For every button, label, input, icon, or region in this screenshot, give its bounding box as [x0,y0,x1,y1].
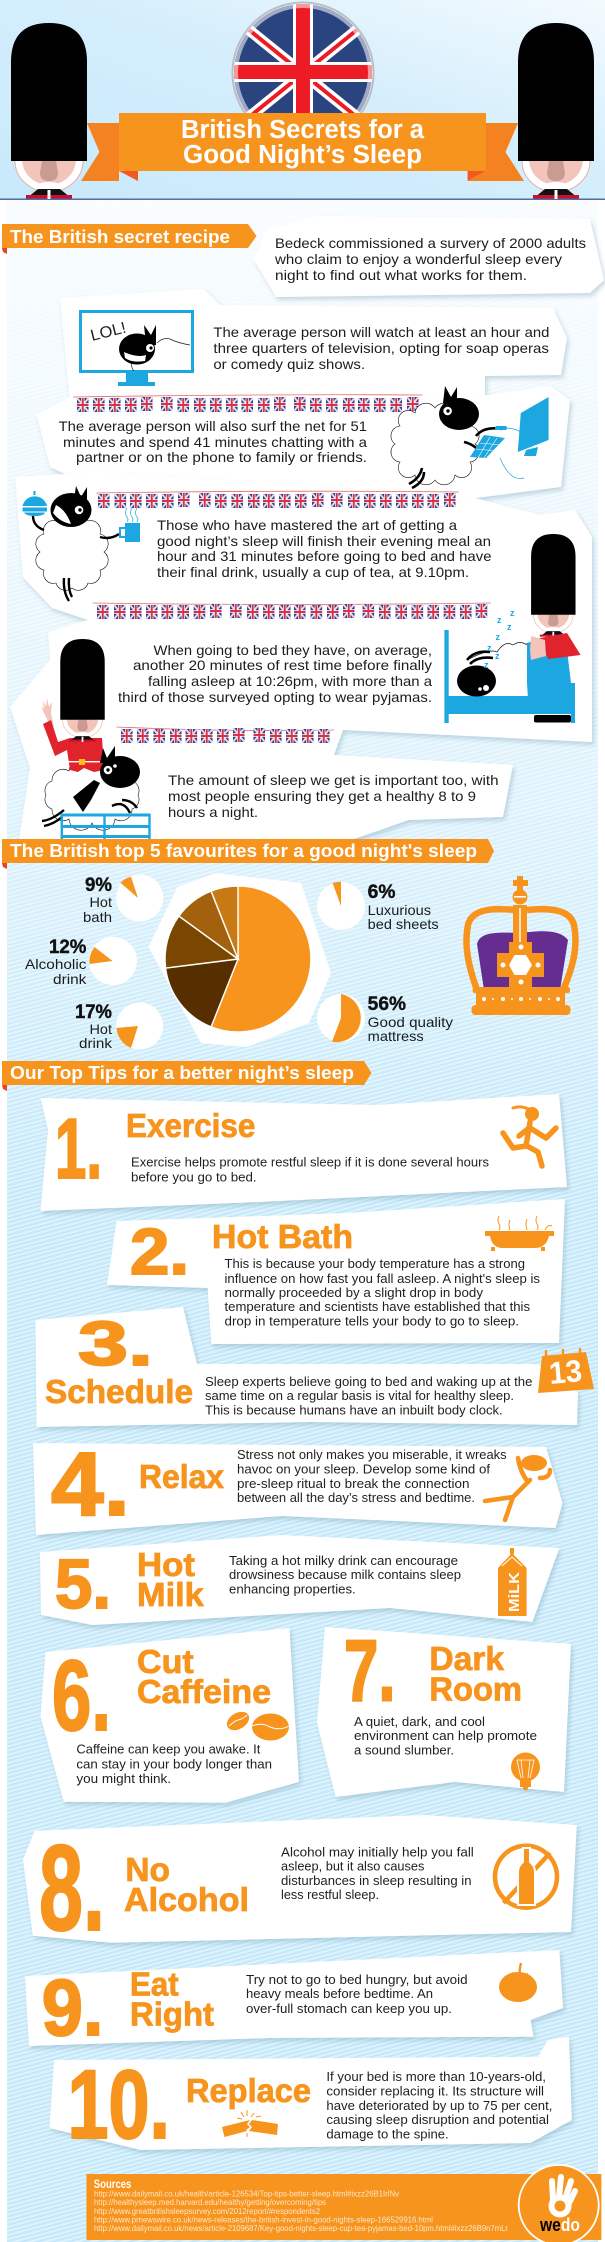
panel: tip 9 eat right [25,1950,563,2052]
icon: milk carton: MiLK [506,1572,523,1612]
stat: 17% hot drink: Hot [90,1021,112,1037]
panel: tip 4 relax: Relax [139,1458,225,1495]
panel: evening meal and going to bed: falling asleep at 10:26pm, with more than a [148,673,432,689]
panel: evening meal and going to bed: another 20 minutes of rest time before finally [133,657,432,673]
panel: tip 10 replace: have deteriorated by up to 75 per cent, [326,2099,552,2113]
panel: evening meal and going to bed: most people ensuring they get a healthy 8 to 9 [168,788,476,804]
icon: sheep on TV: LOL! [89,320,128,345]
icon: tomato [499,1963,537,2002]
panel: surfing the net: The average person will also surf the net for 51 [59,418,367,434]
panel: tip 5 hot milk: 5. [55,1545,111,1623]
stat: 6% luxurious bed sheets [317,882,439,932]
panel: tip 10 replace: If your bed is more than 10-years-old, [326,2070,546,2084]
panel: tip 7 dark room: a sound slumber. [354,1744,454,1758]
icon: sheep at computer [391,386,549,488]
stat: 17% hot drink [75,1002,163,1051]
icon: guard tucking sheep into bed: z [496,632,500,642]
icon: sheep with tea [22,486,140,601]
icon: calendar: 13 [548,1353,583,1391]
panel: tip 4 relax: Stress not only makes you miserable, it wreaks [237,1448,507,1462]
stat: 12% alcoholic drink [25,937,137,987]
icon: guard tucking sheep into bed [444,534,581,723]
panel: evening meal and going to bed: When going to bed they have, on average, [154,642,432,658]
panel: intro: Bedeck commissioned a survery of 2000 adults [275,235,586,251]
panel: tip 7 dark room: A quiet, dark, and cool [354,1715,485,1729]
panel: tip 7 dark room: 7. [344,1623,396,1720]
panel: tip 2 hot bath: 2. [130,1215,189,1288]
panel: evening meal and going to bed: their final drink, usually a cup of tea, at 9.10pm. [157,564,469,580]
panel: tip 4 relax: havoc on your sleep. Develop some kind of [237,1463,491,1477]
panel: tip 1 exercise: before you go to bed. [131,1171,257,1185]
stat: 9% hot bath: 9% [85,875,112,896]
panel: tip 6 cut caffeine: can stay in your body longer than [76,1758,272,1772]
panel: tip 10 replace: causing sleep disruption and potential [326,2113,549,2127]
panel: tip 9 eat right: Eat [130,1966,179,2003]
title: Good Night’s Sleep [183,141,422,169]
heading: British secret recipe: The British secret recipe [10,226,230,247]
panel: tip 8 no alcohol: disturbances in sleep resulting in [281,1874,472,1888]
panel: tip 7 dark room [317,1623,571,1797]
panel: television: three quarters of television, opting for soap operas [213,340,549,356]
sources: http://www.greatbritishsleepsurvey.com/2012report/#respondents2 [94,2206,320,2216]
icon: sheep on TV [80,312,192,386]
heading: top 5 favourites: The British top 5 favourites for a good night's sleep [10,840,477,861]
panel: tip 8 no alcohol: No [125,1851,170,1888]
stat: 56% good quality mattress: 56% [368,994,406,1015]
sources: http://www.prnewswire.co.uk/news-releases/the-british-invest-in-good-nights-sleep-166529916.html [94,2215,433,2225]
icon: no bottle [495,1846,557,1908]
panel: tip 7 dark room: environment can help promote [354,1729,537,1743]
panel: intro [254,216,604,297]
heading: top 5 favourites [2,839,494,869]
icon: guard riding sheep [41,639,150,840]
panel: tip 9 eat right: heavy meals before bedtime. An [246,1987,433,2001]
panel: tip 6 cut caffeine: Cut [137,1643,194,1680]
panel: tip 4 relax: between all the day’s stress and bedtime. [237,1491,475,1505]
bunting 4 [116,727,334,743]
panel: tip 5 hot milk [40,1535,559,1625]
panel: tip 3 schedule: 3. [78,1310,153,1379]
panel: tip 1 exercise: 1. [55,1102,102,1197]
icon: guard tucking sheep into bed: z [510,608,515,618]
panel: tip 2 hot bath: normally proceeded by a slight drop in body [224,1286,484,1300]
panel: tip 4 relax [33,1435,562,1535]
panel: tip 8 no alcohol: Alcohol may initially help you fall [281,1845,474,1859]
icon: guard right [518,23,594,199]
panel: tip 6 cut caffeine [40,1628,299,1803]
icon: guard tucking sheep into bed: z [484,660,489,670]
panel: tip 3 schedule: Schedule [45,1373,193,1410]
icon: guard tucking sheep into bed: z [487,643,492,653]
panel: tip 8 no alcohol: asleep, but it also causes [281,1860,424,1874]
panel: tip 10 replace: 10. [68,2050,170,2159]
panel: tip 3 schedule: This is because humans have an inbuilt body clock. [205,1404,503,1418]
bunting 2 [96,491,459,508]
panel: tip 2 hot bath: This is because your body temperature has a strong [224,1257,525,1271]
icon: guard tucking sheep into bed: z [497,615,502,625]
icon: light bulb [511,1752,540,1790]
panel: evening meal and going to bed: hours a night. [168,804,258,820]
panel: tip 3 schedule [36,1307,594,1427]
bunting 1 [73,395,422,412]
panel: tip 6 cut caffeine: Caffeine can keep you awake. It [76,1743,261,1757]
panel: tip 5 hot milk: enhancing properties. [229,1583,356,1597]
panel: tip 9 eat right: Try not to go to bed hungry, but avoid [246,1973,468,1987]
panel: tip 6 cut caffeine: you might think. [76,1772,171,1786]
icon: broken plank [222,2110,278,2137]
panel: tip 2 hot bath: drop in temperature tells your body to go to sleep. [224,1315,519,1329]
panel: intro: who claim to enjoy a wonderful sleep every [274,251,562,267]
panel: tip 9 eat right: 9. [42,1963,103,2052]
icon: relaxing figure [485,1455,550,1520]
panel: tip 5 hot milk: Taking a hot milky drink can encourage [229,1554,458,1568]
panel: television: The average person will watch at least an hour and [213,324,549,340]
icon: union flag circle [232,2,374,113]
icon: bath [485,1216,554,1251]
stat: 9% hot bath [83,874,163,925]
stat: 17% hot drink: 17% [75,1002,112,1023]
logo: wedo: wedo [539,2215,580,2235]
panel: evening meal and going to bed: The amount of sleep we get is important too, with [168,772,498,788]
panel: tip 4 relax: 4. [51,1435,130,1535]
stat: 56% good quality mattress: mattress [368,1028,424,1044]
title: British Secrets for a [181,116,425,144]
panel: tip 8 no alcohol: Alcohol [124,1881,249,1918]
panel: tip 10 replace: damage to the spine. [326,2128,449,2142]
stat: 56% good quality mattress: Good quality [368,1014,453,1030]
panel: tip 7 dark room: Dark [429,1640,505,1677]
icon: guard tucking sheep into bed: z [507,622,512,632]
panel: evening meal and going to bed: hour and 31 minutes before going to bed and have [157,548,492,564]
icon: guard tucking sheep into bed: z [495,651,500,661]
pie chart: favourites [148,873,331,1047]
panel: tip 5 hot milk: drowsiness because milk contains sleep [229,1568,461,1582]
panel: tip 10 replace: consider replacing it. Its structure will [326,2085,544,2099]
panel: television [60,289,567,402]
panel: tip 4 relax: pre-sleep ritual to break the connection [237,1477,470,1491]
panel: evening meal and going to bed: good night’s sleep will finish their evening meal an [157,533,491,549]
panel: tip 3 schedule: Sleep experts believe going to bed and waking up at the [205,1375,532,1389]
panel: tip 6 cut caffeine: Caffeine [137,1673,271,1710]
heading: top tips [2,1061,372,1091]
sources: Sources [94,2179,131,2191]
icon: runner [503,1107,556,1166]
panel: evening meal and going to bed: third of those surveyed opting to wear pyjamas. [118,689,432,705]
panel: tip 2 hot bath: temperature and scientists have established that this [224,1300,530,1314]
panel: surfing the net: partner or on the phone to family or friends. [76,449,367,465]
stat: 12% alcoholic drink: drink [53,971,87,987]
panel: tip 2 hot bath: Hot Bath [212,1218,353,1255]
sources: http://www.dailymail.co.uk/news/article-2109687/Key-good-nights-sleep-cup-tea-pyjamas-bed-10pm.html#ixzz26B9n7mLr [94,2223,508,2233]
sources [86,2174,601,2240]
panel: tip 6 cut caffeine: 6. [52,1640,111,1752]
panel: tip 8 no alcohol [23,1815,577,1956]
header [0,0,605,200]
panel: television: or comedy quiz shows. [213,356,365,372]
panel: tip 2 hot bath: influence on how fast you fall asleep. A night's sleep is [224,1272,540,1286]
sources: http://healthysleep.med.harvard.edu/healthy/getting/overcoming/tips [94,2197,326,2207]
heading: top tips: Our Top Tips for a better night’s sleep [10,1062,354,1083]
heading: British secret recipe [2,224,256,254]
stat: 12% alcoholic drink: Alcoholic [25,956,86,972]
panel: tip 10 replace [49,2037,572,2159]
icon: guard left [11,23,87,199]
panel: tip 9 eat right: Right [130,1996,214,2033]
panel: tip 1 exercise: Exercise [126,1107,255,1144]
stat: 6% luxurious bed sheets: Luxurious [368,902,431,918]
title ribbon [81,113,524,181]
panel: tip 3 schedule: same time on a regular basis is vital for healthy sleep. [205,1389,514,1403]
stat: 17% hot drink: drink [79,1035,113,1051]
panel: evening meal and going to bed [10,472,592,840]
panel: tip 7 dark room: Room [429,1671,522,1708]
stat: 9% hot bath: bath [83,909,112,925]
icon: calendar [538,1348,594,1393]
stat: 9% hot bath: Hot [90,894,112,910]
panel: tip 10 replace: Replace [186,2072,311,2109]
panel: tip 9 eat right: over-full stomach can keep you up. [246,2002,452,2016]
panel: tip 1 exercise: Exercise helps promote restful sleep if it is done several hours [131,1156,489,1170]
panel: intro: night to find out what works for them. [275,267,527,283]
panel: tip 2 hot bath [107,1199,565,1344]
icon: milk carton [498,1548,527,1616]
icon: coffee beans [224,1708,289,1740]
icon: crown [466,876,576,1015]
panel: surfing the net: minutes and spend 41 minutes chatting with a [63,434,367,450]
panel: tip 8 no alcohol: less restful sleep. [281,1888,379,1902]
panel: surfing the net [37,386,570,500]
panel: tip 5 hot milk: Milk [137,1576,204,1613]
stat: 6% luxurious bed sheets: 6% [368,882,396,903]
stat: 6% luxurious bed sheets: bed sheets [368,916,439,932]
panel: tip 8 no alcohol: 8. [39,1820,105,1956]
stat: 56% good quality mattress [317,994,453,1044]
panel: tip 5 hot milk: Hot [137,1546,195,1583]
logo: wedo [519,2165,599,2242]
panel: tip 1 exercise [40,1094,567,1211]
sources: http://www.dailymail.co.uk/health/article-126534/Top-tips-better-sleep.html#ixzz26B1IrlNv [94,2189,400,2199]
bunting 3 [93,603,491,619]
panel: evening meal and going to bed: Those who have mastered the art of getting a [157,517,457,533]
stat: 12% alcoholic drink: 12% [49,937,87,958]
